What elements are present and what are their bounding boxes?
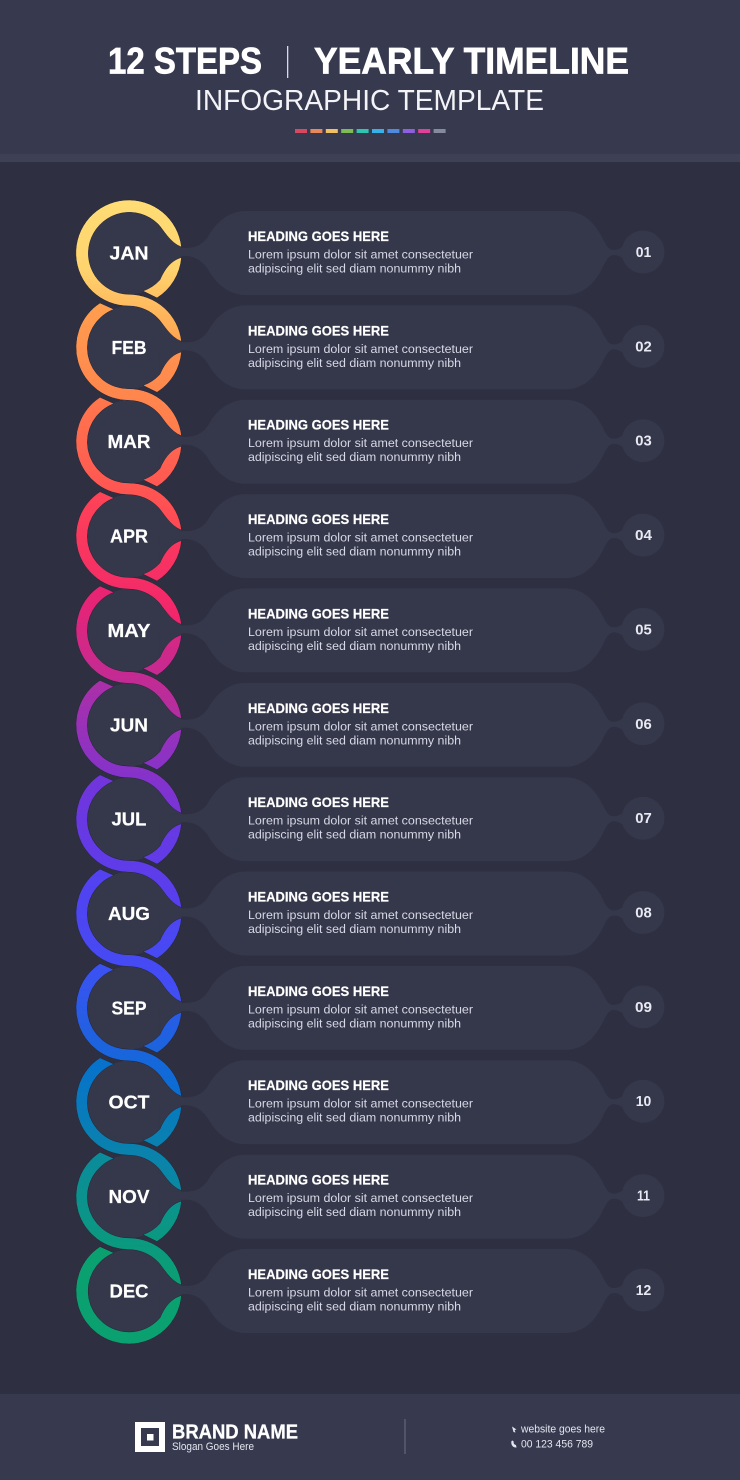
row 05: May: MAY: [108, 621, 150, 641]
row 02: February: adipiscing elit sed diam nonummy nibh: [248, 356, 461, 370]
row 03: March: MAR: [108, 432, 150, 452]
colour dash row: [295, 129, 446, 133]
row 01: January: HEADING GOES HERE: [248, 228, 389, 244]
row 09: September: 09: [635, 1000, 652, 1016]
row 01: January: JAN: [110, 244, 148, 264]
row 06: June: adipiscing elit sed diam nonummy nibh: [248, 733, 461, 747]
ring: October: [76, 1058, 182, 1191]
row 06: June: 06: [635, 717, 652, 733]
ring: December: [76, 1247, 182, 1344]
row 11: November: NOV: [108, 1187, 150, 1207]
row 09: September: [88, 966, 664, 1050]
ring: August: [76, 869, 182, 1002]
row 06: June: Lorem ipsum dolor sit amet consectetuer: [248, 719, 473, 733]
row 07: July: JUL: [112, 810, 146, 830]
ring: May: [76, 586, 182, 719]
row 08: August: adipiscing elit sed diam nonummy nibh: [248, 922, 461, 936]
brand logo: [135, 1422, 165, 1452]
row 07: July: HEADING GOES HERE: [248, 794, 389, 810]
row 12: December: 12: [636, 1283, 651, 1299]
row 12: December: Lorem ipsum dolor sit amet consectetuer: [248, 1286, 473, 1300]
ring: March: [76, 397, 182, 530]
row 09: September: SEP: [112, 998, 146, 1018]
row 04: April: 04: [635, 528, 652, 544]
ring: September: [76, 964, 182, 1096]
row 05: May: adipiscing elit sed diam nonummy nibh: [248, 639, 461, 653]
row 03: March: 03: [635, 434, 652, 450]
row 02: February: FEB: [112, 338, 147, 358]
slogan: Slogan Goes Here: [172, 1441, 254, 1453]
row 06: June: [88, 683, 664, 767]
row 10: October: HEADING GOES HERE: [248, 1077, 389, 1093]
row 03: March: Lorem ipsum dolor sit amet consectetuer: [248, 436, 473, 450]
row 06: June: JUN: [110, 715, 148, 735]
row 10: October: adipiscing elit sed diam nonummy nibh: [248, 1111, 461, 1125]
row 08: August: AUG: [108, 904, 150, 924]
row 05: May: 05: [635, 622, 652, 638]
row 06: June: HEADING GOES HERE: [248, 700, 389, 716]
row 02: February: [88, 305, 664, 389]
row 11: November: adipiscing elit sed diam nonummy nibh: [248, 1205, 461, 1219]
row 10: October: [88, 1060, 664, 1144]
footer band: [0, 1394, 740, 1480]
row 12: December: adipiscing elit sed diam nonummy nibh: [248, 1300, 461, 1314]
row 10: October: Lorem ipsum dolor sit amet consectetuer: [248, 1097, 473, 1111]
row 09: September: Lorem ipsum dolor sit amet consectetuer: [248, 1002, 473, 1016]
row 05: May: Lorem ipsum dolor sit amet consectetuer: [248, 625, 473, 639]
row 03: March: adipiscing elit sed diam nonummy nibh: [248, 450, 461, 464]
row 09: September: HEADING GOES HERE: [248, 983, 389, 999]
row 07: July: Lorem ipsum dolor sit amet consectetuer: [248, 814, 473, 828]
row 12: December: DEC: [110, 1282, 148, 1302]
row 11: November: Lorem ipsum dolor sit amet consectetuer: [248, 1191, 473, 1205]
row 12: December: [88, 1249, 664, 1333]
row 04: April: HEADING GOES HERE: [248, 511, 389, 527]
row 07: July: adipiscing elit sed diam nonummy nibh: [248, 828, 461, 842]
title separator: [287, 46, 288, 78]
row 11: November: 11: [637, 1189, 650, 1205]
row 08: August: 08: [635, 906, 652, 922]
row 08: August: Lorem ipsum dolor sit amet consectetuer: [248, 908, 473, 922]
row 10: October: 10: [636, 1094, 651, 1110]
row 01: January: [88, 211, 664, 295]
title: 12 STEPS: [108, 40, 262, 82]
ring: February: [76, 303, 182, 436]
row 12: December: HEADING GOES HERE: [248, 1266, 389, 1282]
row 04: April: Lorem ipsum dolor sit amet consectetuer: [248, 531, 473, 545]
row 11: November: [88, 1155, 664, 1239]
row 03: March: [88, 400, 664, 484]
ring: July: [76, 775, 182, 908]
row 04: April: APR: [110, 527, 148, 547]
row 07: July: [88, 777, 664, 861]
row 02: February: 02: [635, 339, 652, 355]
row 02: February: HEADING GOES HERE: [248, 322, 389, 338]
row 01: January: Lorem ipsum dolor sit amet consectetuer: [248, 248, 473, 262]
brand name: BRAND NAME: [172, 1422, 298, 1444]
ring: April: [76, 492, 182, 624]
row 03: March: HEADING GOES HERE: [248, 417, 389, 433]
row 02: February: Lorem ipsum dolor sit amet consectetuer: [248, 342, 473, 356]
row 07: July: 07: [635, 811, 652, 827]
website text: website goes here: [520, 1424, 605, 1436]
icon: phone: [511, 1441, 516, 1448]
ring: January: [76, 200, 182, 341]
ring: November: [76, 1152, 182, 1285]
row 10: October: OCT: [108, 1093, 150, 1113]
row 01: January: adipiscing elit sed diam nonummy nibh: [248, 262, 461, 276]
row 01: January: 01: [636, 245, 651, 261]
row 05: May: HEADING GOES HERE: [248, 605, 389, 621]
phone text: 00 123 456 789: [521, 1438, 593, 1450]
row 08: August: HEADING GOES HERE: [248, 888, 389, 904]
icon: cursor: [512, 1426, 516, 1432]
row 09: September: adipiscing elit sed diam nonummy nibh: [248, 1016, 461, 1030]
row 08: August: [88, 872, 664, 956]
ring: June: [76, 680, 182, 813]
header band: [0, 0, 740, 162]
footer divider: [404, 1419, 406, 1454]
title second part: YEARLY TIMELINE: [314, 40, 629, 82]
row 05: May: [88, 588, 664, 672]
row 04: April: adipiscing elit sed diam nonummy nibh: [248, 545, 461, 559]
row 11: November: HEADING GOES HERE: [248, 1172, 389, 1188]
subtitle: INFOGRAPHIC TEMPLATE: [195, 85, 544, 117]
row 04: April: [88, 494, 664, 578]
